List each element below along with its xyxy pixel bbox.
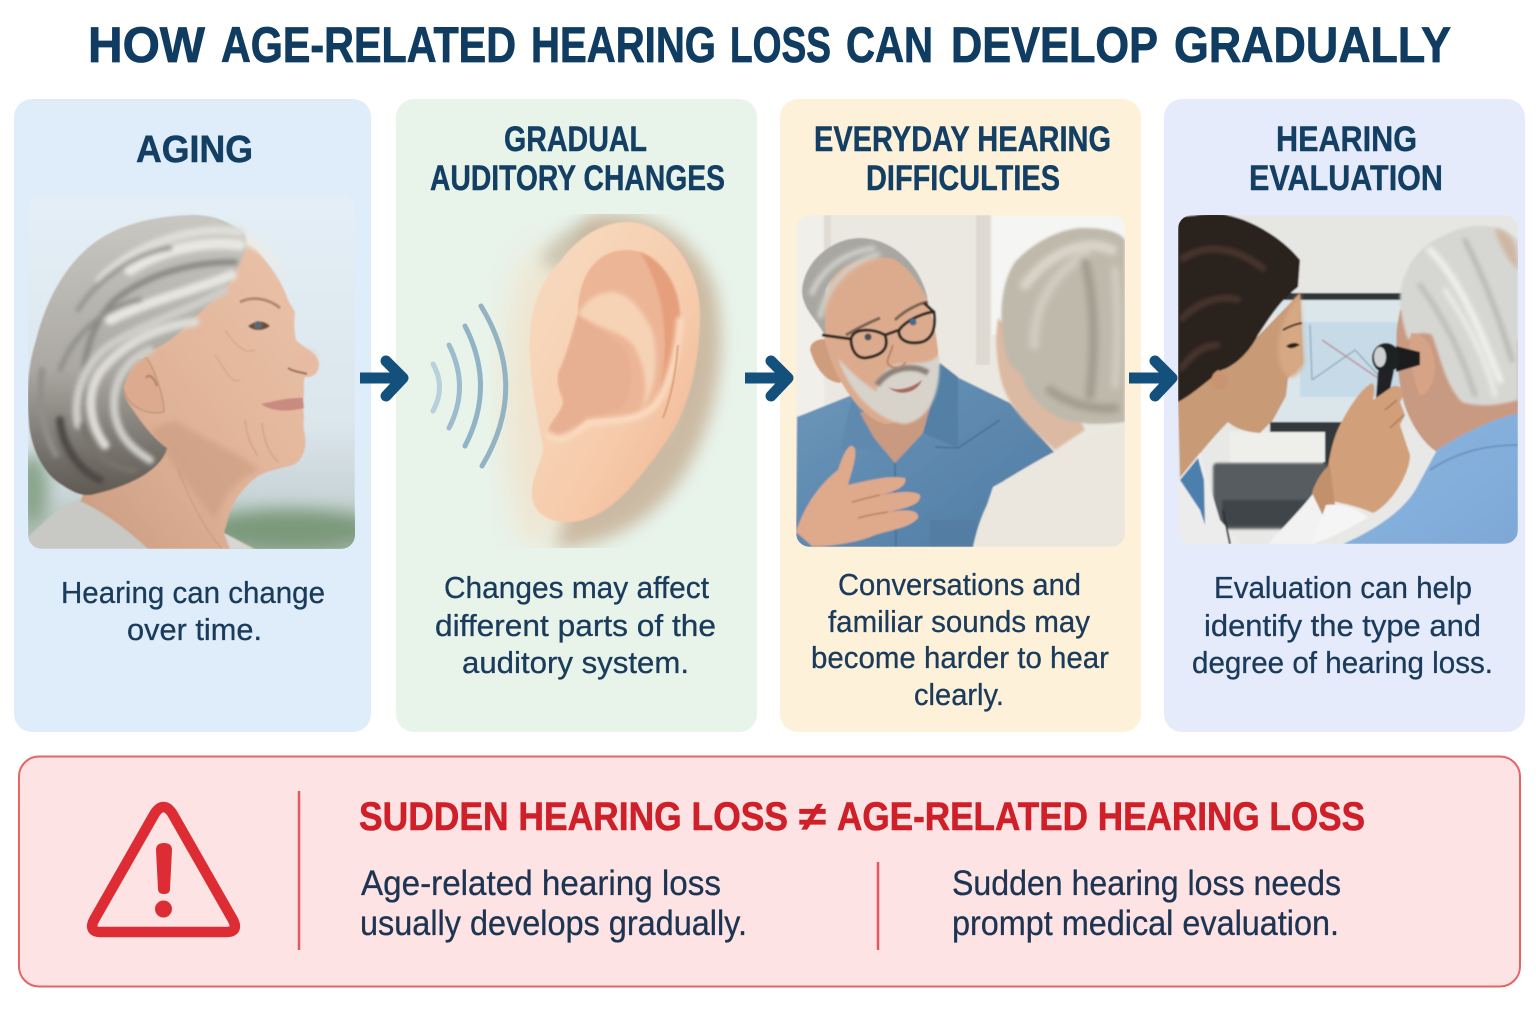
title bbox=[88, 17, 1451, 73]
text: everyday hearing difficulties: Conversations and bbox=[838, 567, 1081, 602]
heading: gradual auditory changes: GRADUAL bbox=[504, 120, 647, 159]
heading: hearing evaluation: EVALUATION bbox=[1249, 159, 1443, 198]
text: everyday hearing difficulties: clearly. bbox=[914, 677, 1004, 712]
panel: hearing evaluation bbox=[1164, 99, 1525, 732]
heading: sudden hearing loss is not age-related hearing loss: AGE-RELATED HEARING LOSS bbox=[837, 795, 1365, 839]
text: gradual auditory changes: Changes may affect bbox=[444, 570, 709, 605]
title: CAN bbox=[846, 17, 933, 73]
text: hearing evaluation: Evaluation can help bbox=[1214, 570, 1472, 605]
panel: aging bbox=[14, 99, 380, 732]
heading: gradual auditory changes bbox=[430, 120, 725, 198]
title: AGE-RELATED bbox=[221, 17, 516, 73]
text: everyday hearing difficulties bbox=[811, 567, 1109, 712]
heading: everyday hearing difficulties bbox=[814, 120, 1111, 198]
icon: warning triangle bbox=[92, 807, 235, 932]
heading: gradual auditory changes: AUDITORY CHANGES bbox=[430, 159, 725, 198]
arrow 3 bbox=[1129, 361, 1172, 396]
text: sudden needs prompt evaluation: prompt medical evaluation. bbox=[952, 904, 1339, 943]
photo: man talking with woman bbox=[796, 215, 1125, 547]
title: GRADUALLY bbox=[1174, 17, 1451, 73]
text: age-related is gradual bbox=[360, 864, 747, 943]
illustration: ear with sound waves bbox=[433, 213, 721, 550]
heading: sudden hearing loss is not age-related hearing loss: ≠ bbox=[799, 795, 826, 839]
photo: clinician examining ear with otoscope bbox=[1178, 214, 1518, 545]
title: HOW bbox=[88, 17, 206, 73]
text: age-related is gradual: usually develops gradually. bbox=[360, 904, 747, 943]
title: DEVELOP bbox=[951, 17, 1158, 73]
text: aging: over time. bbox=[127, 612, 262, 647]
panel: gradual auditory changes bbox=[396, 99, 757, 732]
arrow 2 bbox=[745, 361, 788, 396]
text: everyday hearing difficulties: become harder to hear bbox=[811, 640, 1109, 675]
heading: everyday hearing difficulties: DIFFICULTIES bbox=[866, 159, 1060, 198]
panel: sudden hearing loss warning bbox=[19, 756, 1520, 986]
text: sudden needs prompt evaluation bbox=[952, 864, 1341, 943]
text: hearing evaluation bbox=[1192, 570, 1493, 680]
text: gradual auditory changes: auditory system. bbox=[462, 645, 689, 680]
text: aging: Hearing can change bbox=[61, 575, 325, 610]
title: HEARING bbox=[531, 17, 716, 73]
photo: older woman in profile bbox=[28, 214, 355, 549]
text: hearing evaluation: degree of hearing loss. bbox=[1192, 645, 1493, 680]
heading: everyday hearing difficulties: EVERYDAY HEARING bbox=[814, 120, 1111, 159]
heading: hearing evaluation: HEARING bbox=[1276, 120, 1417, 159]
text: aging bbox=[61, 575, 325, 647]
text: gradual auditory changes: different parts of the bbox=[435, 608, 716, 643]
heading: sudden hearing loss is not age-related hearing loss: SUDDEN HEARING LOSS bbox=[359, 795, 788, 839]
heading: hearing evaluation bbox=[1249, 120, 1443, 198]
heading: aging: AGING bbox=[136, 129, 253, 171]
text: sudden needs prompt evaluation: Sudden hearing loss needs bbox=[952, 864, 1341, 903]
text: age-related is gradual: Age-related hearing loss bbox=[361, 864, 721, 903]
text: gradual auditory changes bbox=[435, 570, 716, 680]
panel: everyday hearing difficulties bbox=[780, 99, 1141, 732]
heading: sudden hearing loss is not age-related hearing loss bbox=[359, 795, 1365, 839]
arrow 1 bbox=[360, 361, 403, 396]
text: everyday hearing difficulties: familiar sounds may bbox=[828, 604, 1090, 639]
text: hearing evaluation: identify the type and bbox=[1204, 608, 1481, 643]
title: LOSS bbox=[730, 17, 831, 73]
